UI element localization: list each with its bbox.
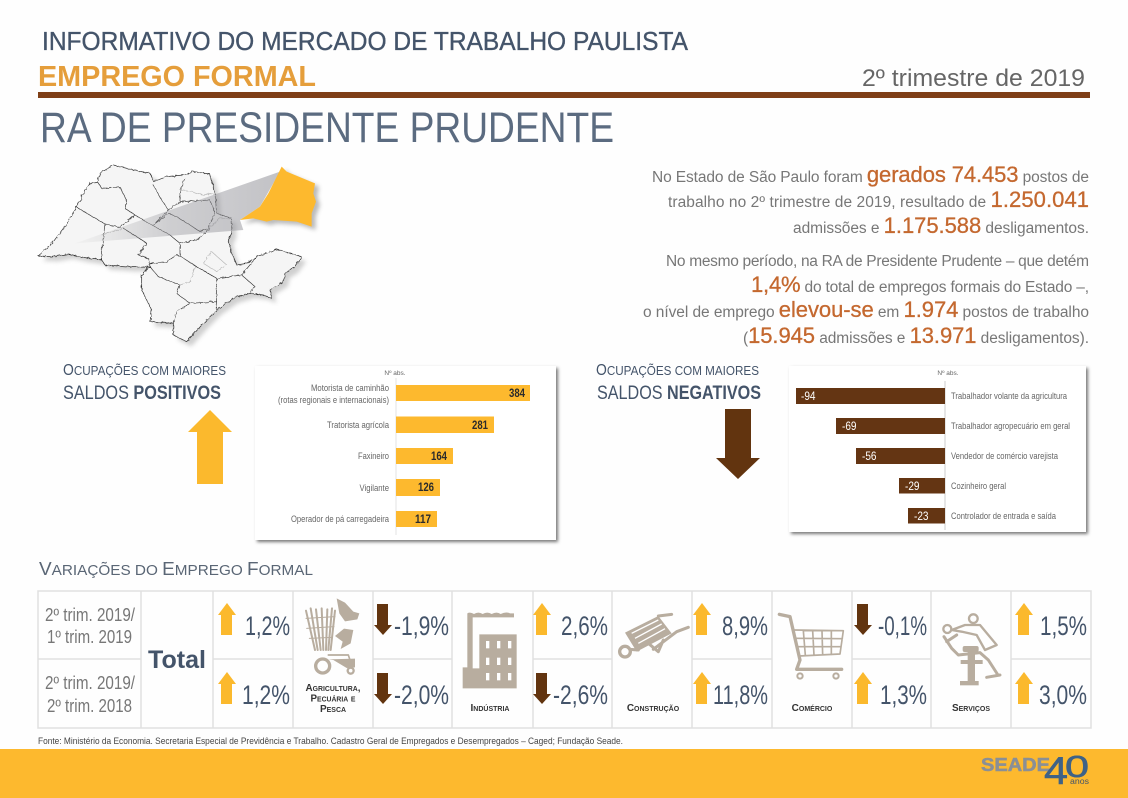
agriculture values (374, 604, 449, 710)
summary text block: 1,4% do total de empregos formais do Estado –, (751, 272, 1089, 297)
heading: variações do emprego formal: VARIAÇÕES DO EMPREGO FORMAL (39, 559, 313, 579)
label: commerce: Comércio (792, 703, 833, 714)
agriculture values: -1,9% (394, 611, 449, 641)
arrow: up (188, 410, 232, 484)
bar chart: positive balances: Motorista de caminhão (311, 383, 389, 393)
bar chart: negative balances: -23 (914, 509, 929, 523)
bar chart: negative balances: Trabalhador volante da agricultura (951, 391, 1067, 401)
bar chart: negative balances: -69 (842, 419, 857, 433)
icon: dental chair (943, 614, 1000, 685)
total values (218, 603, 290, 710)
label: agriculture: Pecuária e (310, 694, 356, 704)
row labels: 2º trim. 2019/ (45, 605, 135, 625)
services values (1015, 603, 1087, 710)
summary text block: admissões e 1.175.588 desligamentos. (793, 213, 1089, 238)
period label: 2º trimestre de 2019 (862, 65, 1085, 92)
services values: 3,0% (1039, 680, 1087, 710)
bar chart: negative balances: -56 (862, 449, 877, 463)
logo: seade 40 anos: 0 (1065, 749, 1089, 784)
bar chart: positive balances: 281 (472, 418, 488, 432)
icon: agriculture (306, 598, 359, 674)
total values: 1,2% (242, 680, 290, 710)
services values: 1,5% (1040, 611, 1087, 641)
bar chart: positive balances (255, 366, 558, 542)
header title: INFORMATIVO DO MERCADO DE TRABALHO PAULISTA (42, 26, 689, 56)
summary text block: trabalho no 2º trimestre de 2019, resultado de 1.250.041 (668, 187, 1089, 212)
bar chart: negative balances: Controlador de entrada e saída (951, 511, 1056, 521)
heading: saldos positivos (63, 362, 226, 404)
commerce values: 1,3% (880, 680, 927, 710)
bar chart: positive balances: Vigilante (360, 483, 389, 493)
label: agriculture: Agricultura, (306, 683, 361, 694)
icon: factory (463, 612, 517, 688)
bar chart: positive balances: (rotas regionais e internacionais) (278, 395, 389, 405)
bar chart: positive balances: Tratorista agrícola (327, 420, 389, 430)
summary text block (643, 162, 1089, 348)
commerce values (854, 604, 927, 710)
bar chart: positive balances: Faxineiro (358, 451, 389, 461)
bar chart: positive balances: Nº abs. (384, 370, 406, 377)
bar chart: negative balances: Nº abs. (937, 370, 959, 377)
summary text block: No Estado de São Paulo foram gerados 74.453 postos de (652, 162, 1089, 187)
source note: Fonte: Ministério da Economia. Secretaria Especial de Previdência e Trabalho. Cadastro Geral de Empregados e Desempregados – Caged; Fundação Seade. (38, 736, 623, 747)
table: variações (38, 591, 1091, 728)
heading: saldos positivos: SALDOS POSITIVOS (63, 383, 221, 404)
row labels: 2º trim. 2019/ (45, 673, 135, 693)
bar chart: negative balances: Cozinheiro geral (951, 481, 1006, 491)
commerce values: -0,1% (878, 611, 927, 641)
total label: Total (148, 646, 206, 674)
logo: seade 40 anos: 4 (1044, 750, 1068, 793)
label: agriculture (306, 683, 361, 715)
construction values (693, 603, 768, 710)
region title: RA DE PRESIDENTE PRUDENTE (40, 104, 614, 152)
map of São Paulo state (38, 165, 320, 346)
agriculture values: -2,0% (394, 680, 449, 710)
heading: saldos negativos: OCUPAÇÕES COM MAIORES (596, 362, 759, 379)
arrow: down (716, 409, 760, 479)
bar chart: positive balances: 117 (415, 512, 431, 526)
bar chart: negative balances: Trabalhador agropecuário em geral (951, 421, 1070, 431)
bar chart: negative balances: -29 (905, 479, 920, 493)
logo: seade 40 anos: anos (1070, 777, 1089, 786)
summary text block: (15.945 admissões e 13.971 desligamentos). (743, 323, 1089, 348)
bar chart: negative balances: Vendedor de comércio varejista (951, 451, 1058, 461)
bar chart: negative balances: -94 (801, 389, 816, 403)
logo: seade 40 anos (981, 749, 1089, 793)
bar chart: positive balances: 126 (418, 480, 434, 494)
heading: saldos negativos: SALDOS NEGATIVOS (597, 383, 761, 404)
label: industry: Indústria (471, 703, 509, 714)
heading: saldos negativos (596, 362, 761, 404)
section label: emprego formal: EMPREGO FORMAL (38, 61, 316, 93)
label: agriculture: Pesca (320, 704, 346, 715)
industry values (533, 603, 608, 710)
label: construction: Construção (627, 703, 680, 714)
row labels: 1º trim. 2019 (47, 627, 132, 647)
label: services: Serviços (952, 703, 990, 714)
construction values: 11,8% (713, 680, 768, 710)
summary text block: No mesmo período, na RA de Presidente Prudente – que detém (666, 253, 1089, 270)
construction values: 8,9% (722, 611, 768, 641)
footer band (0, 749, 1128, 798)
icon: shopping cart (779, 614, 843, 679)
icon: wheelbarrow (620, 614, 688, 657)
bar chart: positive balances: 164 (431, 449, 447, 463)
bar chart: negative balances (789, 366, 1088, 534)
row labels (45, 605, 135, 716)
bar chart: positive balances: 384 (509, 386, 525, 400)
bar chart: positive balances: Operador de pá carregadeira (291, 514, 389, 524)
row labels: 2º trim. 2018 (47, 696, 132, 716)
total values: 1,2% (245, 611, 290, 641)
header rule (38, 92, 1090, 98)
summary text block: o nível de emprego elevou-se em 1.974 postos de trabalho (643, 297, 1089, 322)
logo: seade 40 anos: SEADE (981, 755, 1050, 775)
heading: saldos positivos: OCUPAÇÕES COM MAIORES (63, 362, 226, 379)
industry values: 2,6% (561, 611, 608, 641)
industry values: -2,6% (553, 680, 608, 710)
